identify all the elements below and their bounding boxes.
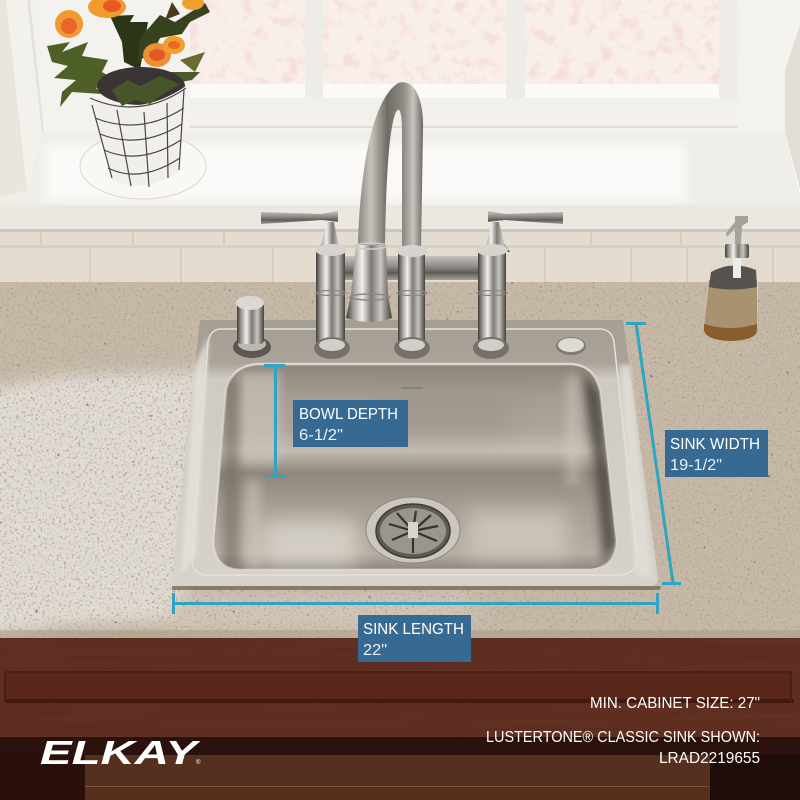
window with blossoms (0, 0, 800, 200)
label: bowl depth (293, 400, 408, 447)
pot front foliage (112, 76, 180, 106)
dimension line: sink length (172, 593, 659, 614)
spout collars (350, 243, 390, 300)
sink rim (172, 320, 658, 586)
pump (726, 216, 748, 244)
label: sink width: SINK WIDTH (670, 436, 760, 453)
faucet (261, 82, 563, 359)
left stem (316, 222, 346, 252)
flower pot and plant (47, 0, 210, 199)
center post (394, 245, 430, 359)
right lever (488, 211, 563, 224)
left post (314, 244, 350, 359)
dimension line: sink width (626, 322, 681, 585)
flowers (55, 0, 204, 67)
right stem (481, 222, 510, 252)
cabinet size note: MIN. CABINET SIZE: 27" (590, 695, 760, 712)
cabinet (0, 638, 800, 800)
pot (90, 86, 186, 186)
left lever (261, 211, 338, 224)
spout base (346, 245, 392, 322)
label: bowl depth: 6-1/2" (299, 427, 343, 444)
soap liquid (704, 280, 757, 341)
stainless steel sink (172, 320, 660, 590)
model note: LRAD2219655 (659, 750, 760, 767)
soil (97, 67, 185, 105)
right post (473, 244, 509, 359)
glass (704, 252, 758, 341)
soap dispenser on sink (233, 296, 271, 358)
tile backsplash (0, 232, 800, 283)
granite countertop (0, 282, 800, 640)
wire grid (90, 88, 186, 187)
model note: LUSTERTONE® CLASSIC SINK SHOWN: (486, 729, 760, 746)
Elkay logo: ELKAY (40, 734, 201, 771)
drain (366, 497, 460, 563)
dimension line: bowl depth (264, 364, 285, 478)
leaves (47, 2, 210, 107)
label: sink length (358, 615, 471, 662)
soap bottle (704, 216, 758, 341)
sink logo mark (401, 387, 423, 389)
Elkay logo: ® (196, 759, 201, 766)
saucer (80, 133, 206, 199)
label: sink width: 19-1/2" (670, 457, 722, 474)
sink hole cover button (556, 337, 586, 355)
Elkay logo (40, 734, 201, 771)
label: sink width (665, 430, 768, 477)
label: bowl depth: BOWL DEPTH (299, 406, 398, 423)
window sill (0, 132, 800, 232)
label: sink length: SINK LENGTH (363, 621, 464, 638)
crossbar (343, 256, 483, 280)
model note (486, 729, 760, 767)
sink bowl (213, 364, 616, 570)
spout (358, 82, 423, 250)
label: sink length: 22" (363, 642, 387, 659)
